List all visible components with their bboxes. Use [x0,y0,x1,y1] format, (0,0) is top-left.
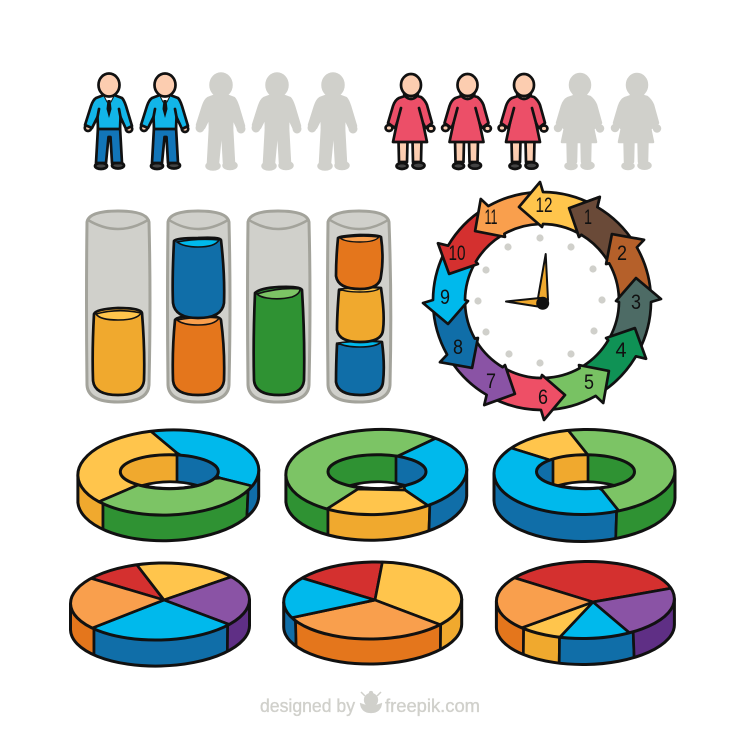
woman filled 2 [442,74,491,169]
clock hour numbers: 5 [584,371,594,394]
pie chart 1 [69,562,251,668]
men pictogram row: 2 of 5 highlighted [85,74,356,170]
tube 1: yellow [86,211,150,402]
woman grey 5 [612,74,660,169]
tube 3: green [248,211,310,402]
women pictogram row: 3 of 5 highlighted [386,74,660,169]
tube 4: orange, yellow and blue [328,211,391,402]
clock hour numbers: 7 [486,370,496,393]
clock hour numbers: 2 [617,242,627,265]
clock arrow ring [413,172,671,430]
tube chart [86,211,391,402]
pie chart 3 [494,560,676,666]
man filled 1 [85,74,132,169]
watermark text right: freepik.com [385,696,480,716]
watermark [260,691,480,716]
infographic canvas [69,72,676,716]
woman filled 1 [386,74,434,169]
clock hour numbers: 9 [440,286,450,309]
icon: freepik logo [360,691,382,713]
clock hour dots [474,234,606,367]
clock with twelve arrows [413,172,671,430]
man filled 2 [141,74,188,169]
man grey 4 [253,74,300,170]
clock hour numbers: 4 [616,339,627,362]
watermark text left: designed by [260,696,355,716]
donut chart 1 [76,428,260,542]
clock hour numbers: 10 [448,242,466,265]
clock hour numbers: 11 [484,206,498,229]
clock hands [506,254,549,310]
clock hour numbers: 8 [453,336,463,359]
tube 2: orange and blue [168,211,230,402]
man grey 3 [197,74,244,170]
clock hour numbers: 12 [536,194,552,217]
clock hour numbers: 3 [631,291,641,314]
clock hour numbers: 6 [538,386,548,409]
woman filled 3 [499,74,547,169]
clock hour numbers [440,194,641,409]
donut chart 2 [284,428,468,542]
woman grey 4 [555,74,603,169]
clock hour numbers: 1 [584,206,592,229]
donut chart 3 [492,428,676,543]
pie chart 2 [282,560,464,666]
man grey 5 [309,74,356,170]
